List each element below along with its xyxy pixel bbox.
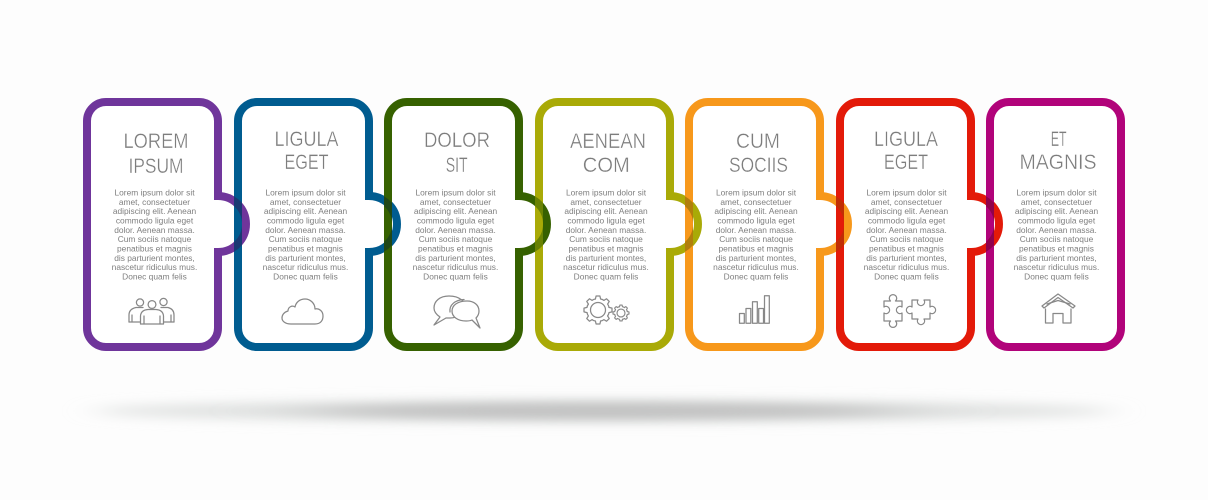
heading: ligula eget	[274, 128, 338, 174]
icon: people	[129, 298, 174, 324]
icon: bar chart	[740, 296, 769, 323]
connector overlap 5-6	[836, 185, 844, 263]
heading: aenean com: AENEAN	[570, 130, 646, 153]
heading: cum sociis	[729, 130, 788, 177]
heading: cum sociis: SOCIIS	[729, 154, 788, 177]
card outline 4: olive with connector	[539, 102, 698, 347]
heading: lorem ipsum	[124, 130, 188, 178]
icon: gears	[584, 296, 629, 324]
card outline 2: blue with connector	[238, 102, 397, 347]
card outline 3: green with connector	[388, 102, 547, 347]
heading: ligula eget: LIGULA	[874, 128, 938, 151]
heading: lorem ipsum: LOREM	[124, 130, 188, 153]
text block: card 4	[563, 188, 649, 282]
heading: et magnis	[1020, 128, 1096, 174]
heading: ligula eget: LIGULA	[274, 128, 338, 151]
text block: card 6	[864, 188, 949, 282]
text block: card 7	[1014, 188, 1099, 282]
floor shadow	[94, 400, 1114, 422]
text block: card 2	[263, 188, 348, 282]
text block: card 1	[112, 188, 197, 282]
icon: speech bubbles	[434, 296, 480, 328]
heading: lorem ipsum: IPSUM	[128, 155, 184, 178]
card outline 7: magenta	[990, 102, 1121, 347]
heading: ligula eget: EGET	[884, 151, 928, 174]
card outline 6: red with connector	[840, 102, 999, 347]
heading: ligula eget	[874, 128, 938, 174]
connector overlap 6-7	[986, 185, 994, 263]
heading: cum sociis: CUM	[736, 130, 780, 153]
heading: et magnis: MAGNIS	[1020, 151, 1096, 174]
icon: house	[1042, 294, 1075, 323]
heading: aenean com	[570, 130, 646, 177]
text block: card 3	[413, 188, 498, 282]
card outline 5: orange with connector	[689, 102, 848, 347]
heading: aenean com: COM	[583, 154, 630, 177]
icon: puzzle pieces	[884, 295, 936, 327]
connector overlap 4-5	[685, 185, 693, 263]
heading: et magnis: ET	[1051, 128, 1067, 151]
heading: ligula eget: EGET	[284, 151, 329, 174]
icon: cloud	[282, 299, 323, 324]
card outline 1: purple with connector	[87, 102, 246, 347]
connector overlap 3-4	[535, 185, 543, 263]
connector overlap 2-3	[384, 185, 392, 263]
heading: dolor sit: DOLOR	[424, 129, 490, 152]
text block: card 5	[713, 188, 799, 282]
connector overlap 1-2	[234, 185, 242, 263]
heading: dolor sit	[424, 129, 490, 177]
heading: dolor sit: SIT	[446, 154, 468, 177]
